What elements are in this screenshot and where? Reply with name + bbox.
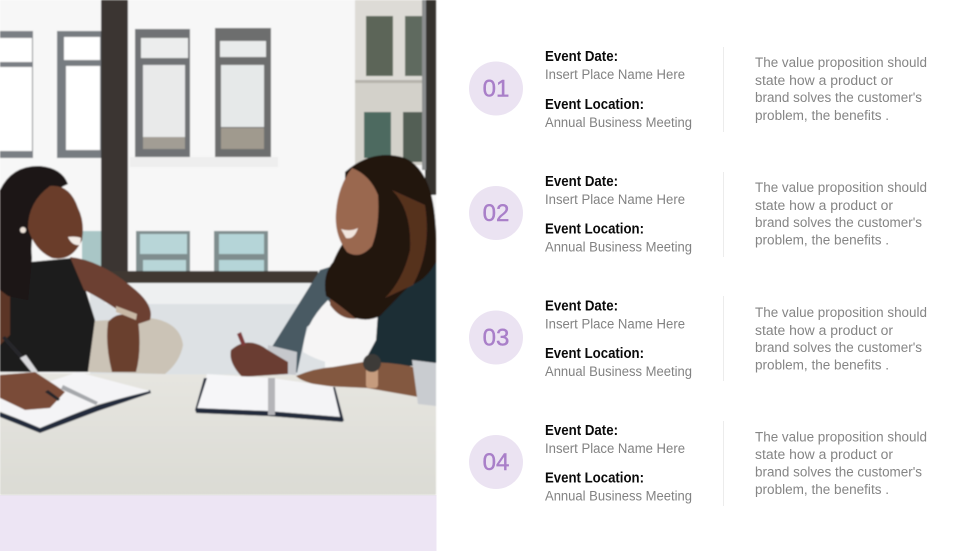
description 04: state how a product or	[755, 447, 894, 462]
description 02: The value proposition should	[755, 180, 927, 195]
event details 02: Event Date:	[545, 174, 618, 190]
event details 03: Insert Place Name Here	[545, 316, 685, 332]
description 04: brand solves the customer's	[755, 464, 922, 480]
divider 04	[723, 421, 724, 506]
event details 02: Insert Place Name Here	[545, 192, 685, 207]
description 04: problem, the benefits .	[755, 482, 889, 497]
divider 02	[723, 172, 724, 257]
number badge 03: 03	[483, 324, 509, 352]
description 02	[755, 180, 927, 248]
event details 03: Event Date:	[545, 298, 618, 314]
number badge 01: 01	[483, 76, 509, 102]
description 01: The value proposition should	[755, 55, 927, 70]
number badge 03	[469, 310, 523, 364]
number badge 02	[469, 186, 523, 240]
description 02: problem, the benefits .	[755, 232, 889, 248]
event details 04: Event Location:	[545, 470, 644, 486]
event details 04: Event Date:	[545, 423, 618, 439]
event details 01: Annual Business Meeting	[545, 115, 692, 130]
event details 03: Annual Business Meeting	[545, 364, 692, 379]
description 02: brand solves the customer's	[755, 215, 922, 230]
event details 01: Event Location:	[545, 97, 644, 113]
event details 04: Annual Business Meeting	[545, 488, 692, 504]
description 02: state how a product or	[755, 198, 894, 213]
event details 02: Event Location:	[545, 222, 644, 238]
photo: two women meeting at a table	[0, 0, 436, 495]
row 03	[469, 296, 927, 381]
description 03: problem, the benefits .	[755, 358, 889, 372]
number badge 04: 04	[483, 449, 509, 476]
divider 03	[723, 296, 724, 381]
event details 02	[545, 174, 692, 254]
lavender panel under photo	[0, 495, 436, 551]
event details 04: Insert Place Name Here	[545, 441, 685, 456]
event details 03	[545, 298, 692, 379]
description 03	[755, 305, 927, 372]
description 01: problem, the benefits .	[755, 108, 889, 123]
number badge 04	[469, 435, 523, 489]
row 04	[469, 421, 927, 506]
description 04	[755, 430, 927, 497]
row 01	[469, 47, 927, 132]
description 01	[755, 55, 927, 123]
event details 04	[545, 423, 692, 504]
description 03: The value proposition should	[755, 305, 927, 320]
event details 02: Annual Business Meeting	[545, 240, 692, 254]
divider 01	[723, 47, 724, 132]
event details 01	[545, 49, 692, 130]
event details 01: Event Date:	[545, 49, 618, 65]
description 04: The value proposition should	[755, 430, 927, 444]
description 03: brand solves the customer's	[755, 340, 922, 355]
row 02	[469, 172, 927, 257]
event details 01: Insert Place Name Here	[545, 67, 685, 82]
number badge 02: 02	[483, 200, 509, 227]
description 01: brand solves the customer's	[755, 90, 922, 105]
event details 03: Event Location:	[545, 346, 644, 362]
description 03: state how a product or	[755, 323, 894, 338]
number badge 01	[469, 62, 523, 116]
description 01: state how a product or	[755, 73, 894, 88]
